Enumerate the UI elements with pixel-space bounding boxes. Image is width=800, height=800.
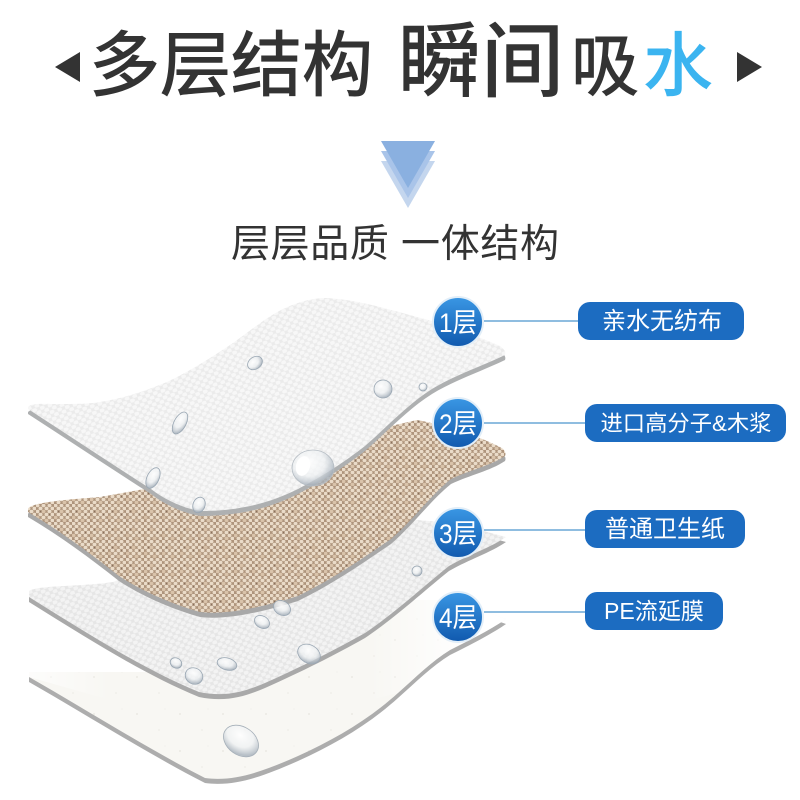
badge: layer 3 <box>433 508 483 558</box>
icon: layered down arrow <box>381 141 435 208</box>
badge: layer 1 <box>433 297 483 347</box>
water drops on layer 3 <box>168 566 422 687</box>
badge: layer 1: 1层 <box>439 308 477 338</box>
label: layer 2 material <box>585 404 786 442</box>
badge: layer 3: 3层 <box>439 519 477 549</box>
badge: layer 4 <box>433 592 483 642</box>
title: main heading <box>89 17 713 108</box>
subtitle: 层层品质 一体结构 <box>231 223 559 266</box>
title: main heading: 多层结构 <box>89 27 373 106</box>
title: right arrow <box>737 52 762 82</box>
layer 2: wood pulp <box>28 420 505 618</box>
badge: layer 4: 4层 <box>439 603 477 633</box>
title: left arrow <box>55 52 80 82</box>
title: main heading: 瞬间 <box>398 17 564 108</box>
label: layer 3 material: 普通卫生纸 <box>605 516 725 543</box>
layer 4: PE film <box>29 600 506 784</box>
label: layer 3 material <box>585 510 745 548</box>
leader lines <box>484 321 586 612</box>
badge: layer 2: 2层 <box>439 409 477 439</box>
label: layer 4 material <box>585 592 723 630</box>
layer 3: absorbent paper <box>29 520 506 699</box>
title: main heading: 吸 <box>571 29 639 105</box>
layer 1: hydrophilic non-woven <box>28 298 505 516</box>
label: layer 1 material <box>578 302 744 340</box>
label: layer 4 material: PE流延膜 <box>604 598 704 624</box>
water drops on layer 1 <box>143 353 427 515</box>
label: layer 2 material: 进口高分子&木浆 <box>600 411 772 436</box>
water drop on layer 4 <box>217 719 265 763</box>
badge: layer 2 <box>433 398 483 448</box>
label: layer 1 material: 亲水无纺布 <box>602 308 722 335</box>
title: main heading: 水 <box>643 27 713 105</box>
